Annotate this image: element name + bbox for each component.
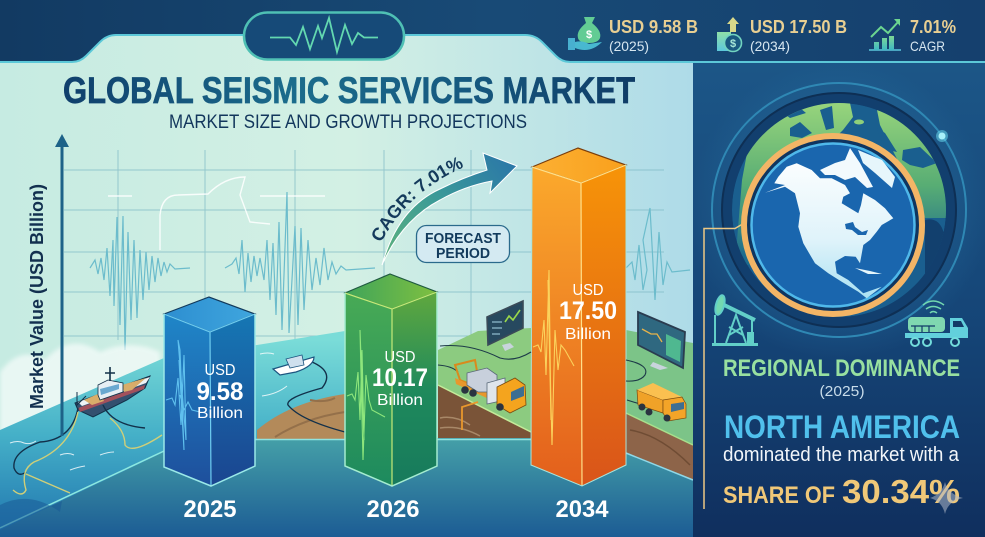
header edge highlight [0, 35, 985, 62]
forecast period badge [416, 226, 510, 262]
title: GLOBAL SEISMIC SERVICES MARKET [63, 70, 635, 111]
panel: regional dominance [693, 63, 985, 537]
magnified North America inset [744, 136, 922, 314]
cuba [855, 268, 882, 274]
value label 2034 [559, 282, 617, 343]
floor edge lines [255, 438, 531, 440]
value label 2026: USD [384, 349, 416, 366]
KPI: CAGR: CAGR [910, 38, 945, 54]
value label 2025 [196, 362, 244, 422]
chart grid lines [64, 150, 664, 340]
water: left ocean [0, 331, 345, 530]
CAGR path label: CAGR: 7.01% [372, 157, 463, 240]
year labels: 2034 [556, 496, 609, 523]
white trace line [108, 177, 325, 250]
KPI: market size 2034 [717, 17, 847, 54]
icon: small survey boat [273, 355, 314, 375]
value label 2025: 9.58 [196, 378, 244, 406]
bar: 2026 [345, 274, 437, 486]
icon: coin with up arrow: $ [730, 38, 736, 50]
share value [723, 473, 960, 510]
seismic waveforms [90, 192, 690, 350]
subtitle: MARKET SIZE AND GROWTH PROJECTIONS [169, 112, 527, 133]
icon: monitor right [638, 312, 685, 370]
y axis arrow [55, 134, 69, 436]
bar: 2025 [164, 297, 255, 486]
ground cables [438, 346, 646, 404]
regional year: (2025) [820, 383, 865, 400]
clouds [0, 344, 160, 440]
KPI: market size 2025: USD 9.58 B [609, 17, 698, 37]
globe [712, 83, 966, 337]
icon: large survey ship [75, 367, 150, 417]
value label 2026 [372, 349, 428, 409]
icon: survey truck [905, 301, 968, 346]
icon: orange drilling truck [455, 360, 526, 430]
floor [0, 438, 693, 537]
share value: SHARE OF [723, 482, 835, 509]
seismic streamer cables [13, 362, 345, 494]
share value: 30.34% [842, 473, 960, 510]
icon: seismic pill badge [244, 12, 404, 60]
KPI: market size 2025 [568, 17, 698, 54]
seas [782, 106, 937, 168]
great lakes [845, 222, 868, 235]
North America landmass [765, 163, 893, 298]
KPI: market size 2034: (2034) [750, 38, 790, 54]
value label 2034: 17.50 [559, 297, 617, 325]
year labels [184, 496, 609, 523]
icon: rising bar chart [869, 19, 901, 50]
sand shore [257, 394, 345, 439]
arctic islands [820, 148, 873, 188]
panel: dark header band [0, 0, 985, 62]
land: western hemisphere [735, 102, 853, 265]
forecast period badge: FORECAST [425, 231, 501, 247]
panel: light chart background [0, 35, 693, 537]
value label 2025: USD [204, 362, 236, 379]
value label 2026: Billion [377, 392, 423, 409]
south america [832, 317, 848, 329]
value label 2034: USD [572, 282, 604, 299]
icon: monitor centre [487, 301, 523, 351]
africa shadow [925, 219, 944, 274]
KPI: market size 2025: (2025) [609, 38, 649, 54]
value label 2025: Billion [197, 405, 243, 422]
callout connector [704, 222, 746, 509]
icon: money bag in hand: $ [586, 29, 592, 41]
land: right field [626, 330, 693, 480]
value label 2026: 10.17 [372, 364, 428, 392]
land: europe [877, 110, 946, 218]
KPI: market size 2034: USD 17.50 B [750, 17, 847, 37]
globe glow [689, 60, 985, 360]
KPI: CAGR [869, 17, 956, 54]
watermark sparkle [930, 482, 963, 514]
bar: 2034 [531, 148, 626, 486]
forecast period badge: PERIOD [436, 246, 490, 262]
KPI: CAGR: 7.01% [910, 17, 956, 37]
icon: oil pump jack [712, 294, 758, 344]
growth arrow [382, 153, 517, 265]
greenland [858, 150, 895, 188]
value label 2034: Billion [565, 326, 611, 343]
dominance sentence: dominated the market with a [723, 444, 960, 466]
land: centre field [438, 328, 531, 438]
icon: orange truck right [637, 383, 686, 422]
y axis label: Market Value (USD Billion) [27, 184, 47, 409]
year labels: 2025 [184, 496, 236, 523]
year labels: 2026 [366, 496, 420, 523]
